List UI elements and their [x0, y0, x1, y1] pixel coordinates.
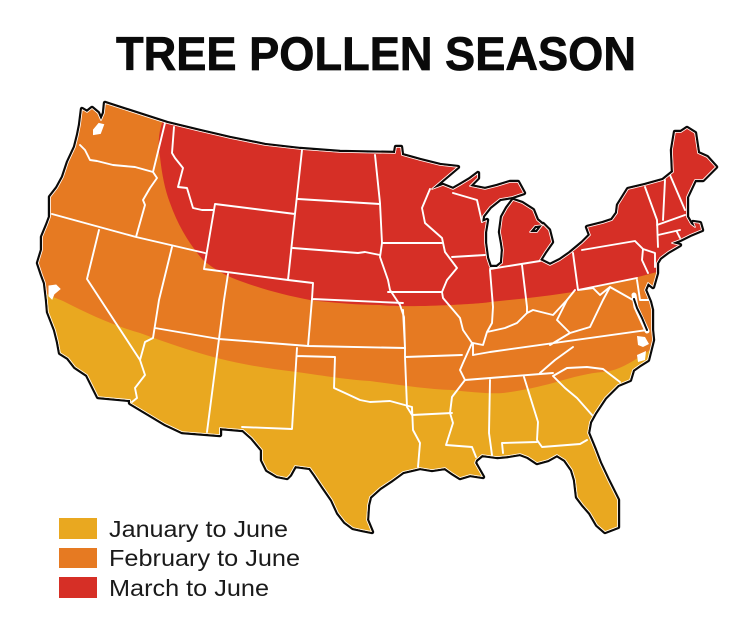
- borders: plains: [242, 155, 462, 467]
- borders: great lakes: [422, 189, 575, 457]
- map outline: [38, 103, 716, 532]
- water: San Francisco Bay: [49, 285, 60, 299]
- title: TREE POLLEN SEASON: [116, 27, 636, 80]
- legend: [59, 516, 300, 601]
- water: Pamlico Sound: [637, 336, 649, 362]
- zone: January to June: [46, 294, 650, 532]
- borders: northeast: [573, 175, 685, 300]
- climate zones: [30, 90, 730, 550]
- zone: March to June: [158, 121, 716, 306]
- inner coast edge: [38, 103, 716, 532]
- borders: northwest: [52, 123, 213, 253]
- borders: mountain: [87, 150, 405, 432]
- legend: March to June: [59, 575, 269, 601]
- legend: March to June: March to June: [109, 575, 269, 601]
- water: Chesapeake Bay: [634, 295, 647, 331]
- map of the United States: [30, 90, 730, 550]
- water: Puget Sound: [94, 124, 103, 134]
- state borders: [38, 103, 716, 532]
- zone: February to June: [30, 90, 730, 550]
- legend: January to June: January to June: [109, 516, 288, 542]
- borders: southeast: [465, 287, 647, 455]
- legend: February to June: February to June: [109, 545, 300, 571]
